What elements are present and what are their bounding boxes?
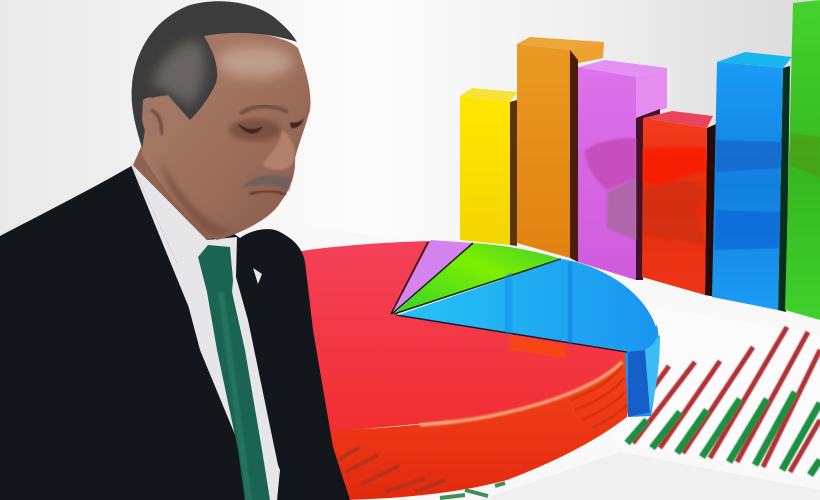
moustache (242, 175, 290, 191)
blue slice (398, 259, 657, 351)
mouth (250, 191, 286, 195)
green column (785, 0, 820, 320)
reflected orange patch (510, 335, 566, 358)
red column (642, 111, 716, 297)
pie chart: 3D sliced disc (295, 240, 660, 500)
rim highlight (420, 362, 622, 425)
cheek shadow (160, 160, 235, 235)
tie (198, 245, 270, 500)
red rim (300, 352, 630, 500)
grey hair sides (152, 41, 205, 108)
green slice (394, 243, 561, 314)
blue column (712, 52, 792, 312)
person: head (132, 1, 310, 240)
lapel pin (253, 268, 262, 284)
hair (132, 1, 297, 148)
yellow column (460, 88, 518, 246)
rim ribs (570, 365, 627, 428)
orange column (517, 37, 604, 262)
rim dark stripes (338, 447, 445, 492)
shirt (131, 163, 280, 500)
eye socket shadow (229, 119, 281, 141)
line chart: striped bars on the floor (627, 327, 820, 475)
eyebrow (240, 106, 288, 114)
purple column (578, 60, 667, 280)
eye (237, 123, 263, 134)
forehead highlight (217, 46, 293, 78)
bar chart: 3D columns (460, 0, 820, 320)
nose (263, 130, 295, 170)
neck (133, 145, 240, 240)
ear (142, 97, 171, 152)
blue rim (625, 325, 659, 417)
person: suit and torso (0, 163, 350, 500)
jacket (0, 165, 350, 500)
purple slice (392, 240, 473, 314)
face (140, 32, 310, 240)
red slice (295, 241, 625, 433)
